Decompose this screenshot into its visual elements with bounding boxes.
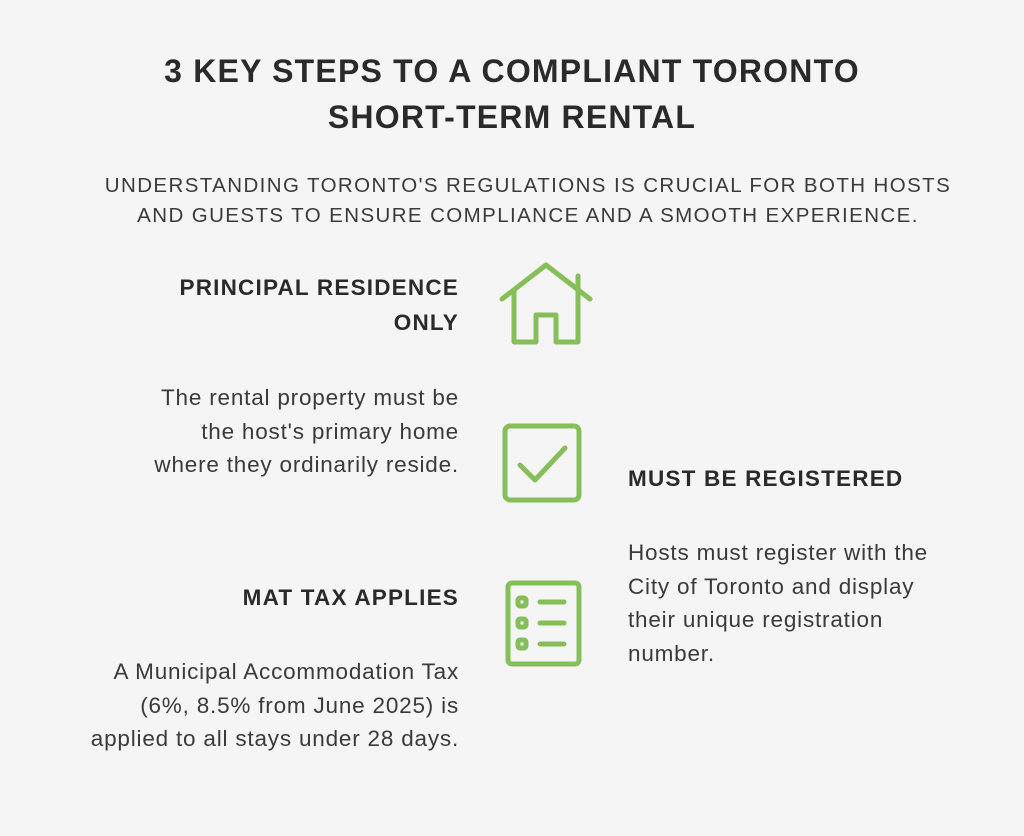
heading: must be registered: MUST BE REGISTERED [628, 466, 903, 491]
text: principal residence: where they ordinarily reside. [154, 452, 459, 477]
subtitle: AND GUESTS TO ENSURE COMPLIANCE AND A SMOOTH EXPERIENCE. [137, 204, 919, 227]
text: MAT tax [91, 659, 459, 751]
heading: principal residence [179, 275, 459, 335]
text: MAT tax: (6%, 8.5% from June 2025) is [140, 693, 459, 718]
text: must be registered: City of Toronto and display [628, 574, 914, 599]
subtitle [105, 174, 951, 227]
text: must be registered: Hosts must register with the [628, 540, 928, 565]
text: must be registered: number. [628, 641, 715, 666]
text: MAT tax: A Municipal Accommodation Tax [114, 659, 459, 684]
text: must be registered: their unique registration [628, 607, 883, 632]
text: principal residence: the host's primary home [201, 419, 459, 444]
heading: principal residence: ONLY [394, 310, 459, 335]
title [164, 53, 860, 135]
text: MAT tax: applied to all stays under 28 days. [91, 726, 459, 751]
title: SHORT-TERM RENTAL [328, 99, 696, 135]
title: 3 KEY STEPS TO A COMPLIANT TORONTO [164, 53, 860, 89]
text: principal residence [154, 385, 459, 477]
subtitle: UNDERSTANDING TORONTO'S REGULATIONS IS CRUCIAL FOR BOTH HOSTS [105, 174, 951, 197]
text: must be registered [628, 540, 928, 666]
heading: principal residence: PRINCIPAL RESIDENCE [179, 275, 459, 300]
heading: MAT tax: MAT TAX APPLIES [243, 585, 459, 610]
text: principal residence: The rental property must be [161, 385, 459, 410]
